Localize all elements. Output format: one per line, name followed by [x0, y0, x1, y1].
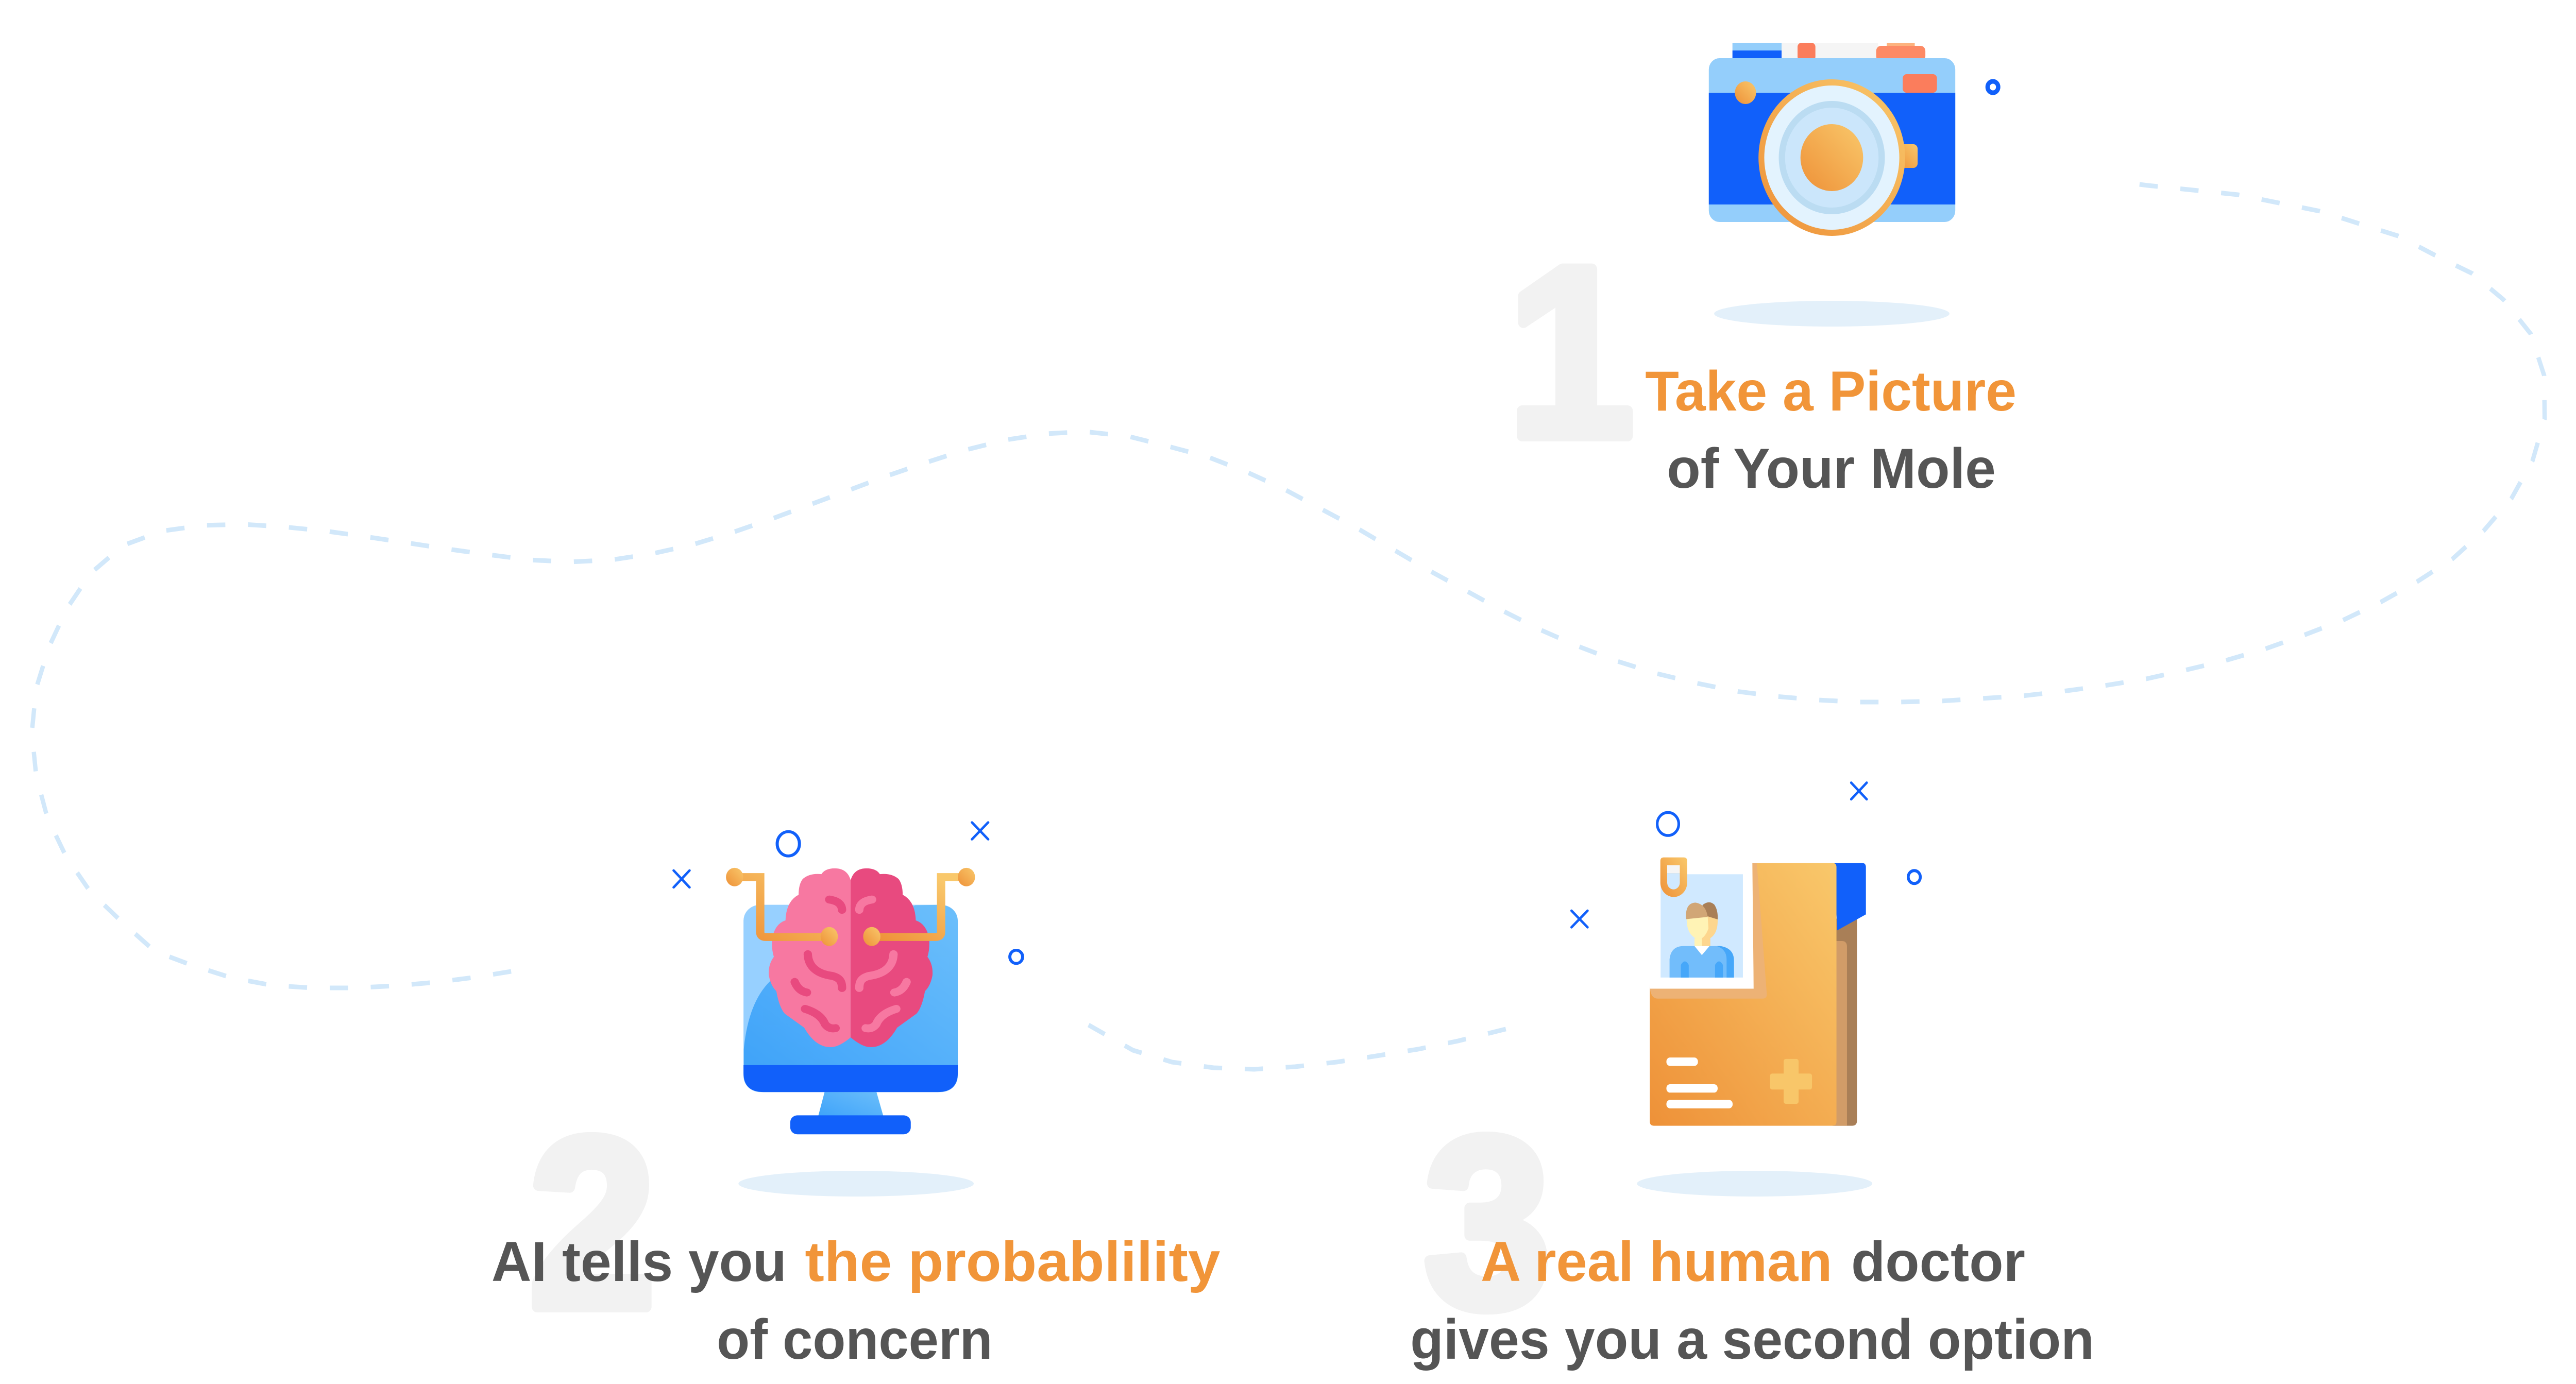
- number 1: 1: [1508, 217, 1634, 487]
- icon: brain on monitor: [674, 823, 1023, 1134]
- decorations: [1571, 783, 1920, 927]
- person: [1670, 902, 1734, 978]
- step 3 caption: doctor: [1851, 1230, 2025, 1293]
- shadow under monitor: [738, 1171, 974, 1197]
- step 3 caption: [1410, 1230, 2094, 1371]
- step 2: [492, 823, 1220, 1371]
- step 1 caption: [1645, 360, 2016, 500]
- plus sign: [1770, 1059, 1812, 1104]
- tab: [1834, 863, 1866, 930]
- photo card: [1660, 874, 1743, 978]
- dashed path: main route: [32, 184, 2545, 988]
- number 2: 2: [529, 1088, 655, 1358]
- paper shadow: [1650, 863, 1767, 999]
- step 3 caption: A real human: [1481, 1230, 1832, 1293]
- icon: camera: [1709, 43, 1955, 236]
- dashed path: connector between step 2 and step 3: [1089, 1025, 1510, 1069]
- text lines: [1666, 1057, 1733, 1108]
- step 3 caption: gives you a second option: [1410, 1308, 2094, 1371]
- step 2 caption: of concern: [717, 1308, 993, 1371]
- step 2 caption: AI tells you: [492, 1230, 787, 1293]
- paper clip: [1660, 858, 1687, 897]
- decorations: [674, 823, 1023, 963]
- step 2 caption: the probablility: [805, 1230, 1220, 1293]
- step 1 caption: of Your Mole: [1667, 437, 1996, 500]
- back sheets: [1833, 918, 1857, 1126]
- step 1 caption: Take a Picture: [1645, 360, 2016, 423]
- decoration: small ring: [1988, 81, 1998, 93]
- shadow under folder: [1637, 1171, 1872, 1197]
- shadow under camera: [1714, 301, 1950, 327]
- number 3: 3: [1425, 1088, 1550, 1358]
- step 3: [1410, 783, 2094, 1371]
- wiring and nodes: [726, 868, 975, 946]
- folder body: [1650, 863, 1837, 1126]
- icon: medical folder: [1571, 783, 1920, 1126]
- brain: [769, 868, 933, 1047]
- step 2 caption: [492, 1230, 1220, 1371]
- step 1: [1508, 43, 2016, 500]
- monitor: [743, 905, 958, 1134]
